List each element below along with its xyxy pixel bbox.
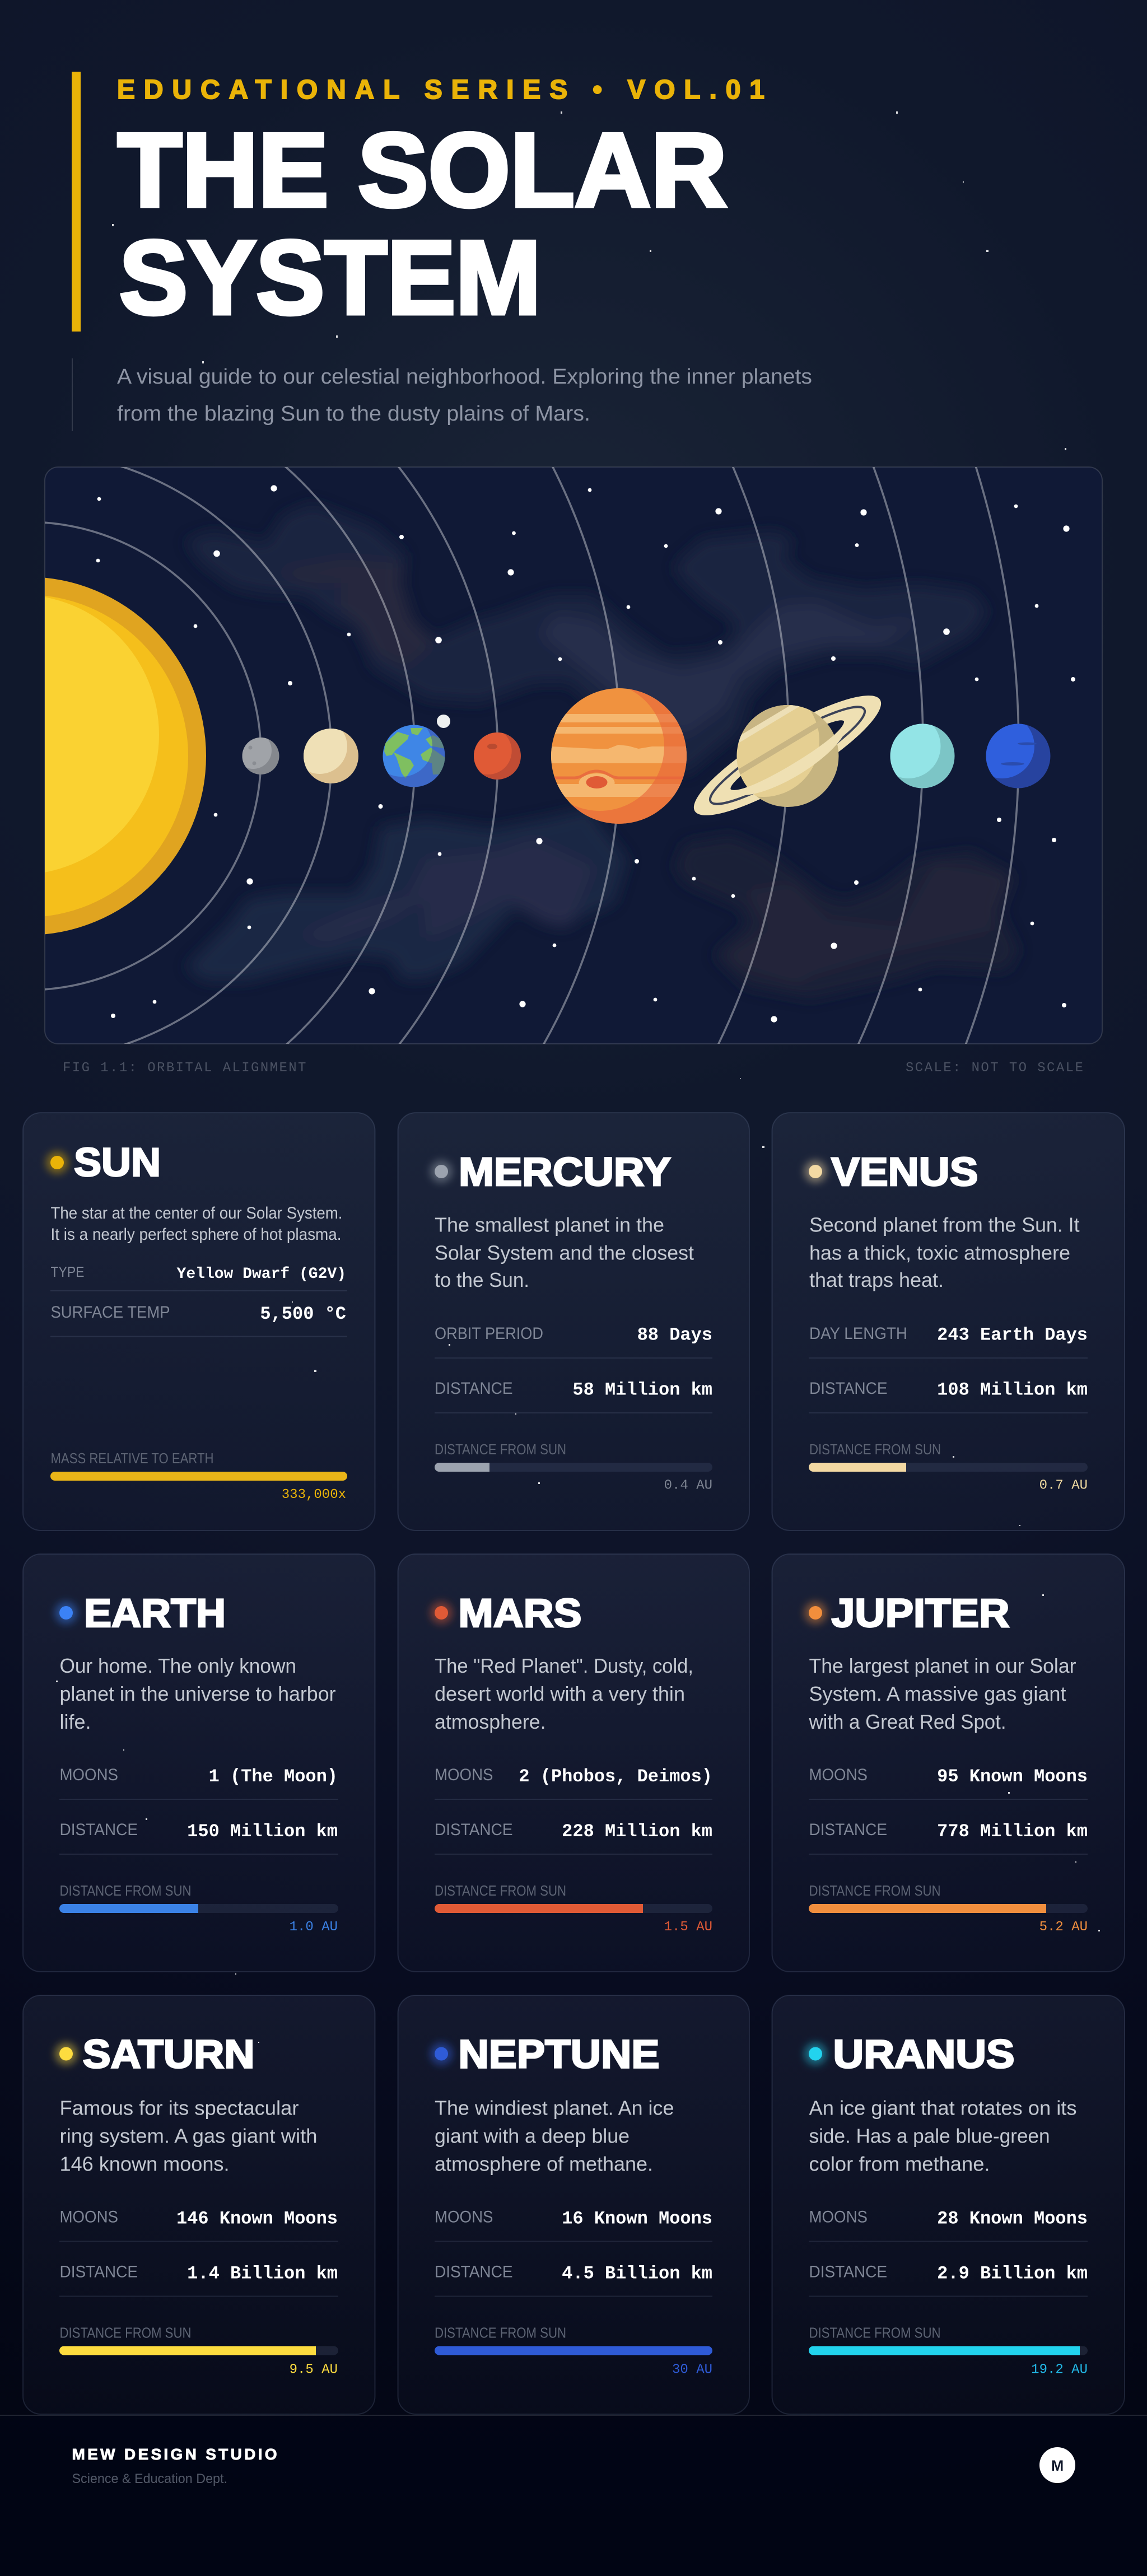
stat: type <box>50 1263 347 1291</box>
description: Solar System and the closest <box>435 1241 694 1264</box>
accent bar <box>72 72 81 332</box>
description <box>809 1213 1080 1291</box>
description: planet in the universe to harbor <box>59 1682 336 1705</box>
stat: moons: MOONS <box>59 2208 118 2227</box>
planet: mars <box>474 732 521 780</box>
heading: SATURN <box>83 2033 255 2076</box>
bar: distance from sun: DISTANCE FROM SUN <box>59 2324 192 2341</box>
stat: distance: 150 Million km <box>187 1821 338 1842</box>
subtitle: A visual guide to our celestial neighborhood. Exploring the inner planets <box>117 365 812 389</box>
stat: distance <box>435 2262 712 2297</box>
heading: JUPITER <box>831 1592 1009 1636</box>
description <box>435 2097 674 2175</box>
planet: saturn with rings <box>682 671 893 833</box>
description: atmosphere. <box>435 1710 545 1733</box>
stat: moons <box>435 2208 712 2242</box>
stat: moons <box>59 1766 338 1800</box>
subtitle: from the blazing Sun to the dusty plains of Mars. <box>117 402 590 426</box>
stat: moons: 1 (The Moon) <box>209 1766 338 1787</box>
heading: NEPTUNE <box>458 2033 660 2076</box>
subtitle rule <box>72 358 73 431</box>
bar: distance from sun: 0.7 AU <box>1039 1478 1088 1493</box>
description: has a thick, toxic atmosphere <box>809 1241 1070 1264</box>
title: THE SOLAR <box>118 111 727 228</box>
bar: distance from sun <box>435 1882 712 1935</box>
description: desert world with a very thin <box>435 1682 685 1705</box>
dot <box>430 2043 453 2065</box>
stat: distance: DISTANCE <box>435 2262 513 2281</box>
logo badge <box>1039 2447 1075 2483</box>
bar: distance from sun: DISTANCE FROM SUN <box>59 1882 192 1899</box>
heading: EARTH <box>84 1592 226 1636</box>
card: mars <box>398 1554 749 1972</box>
stat: moons: MOONS <box>435 1766 493 1784</box>
description <box>435 1213 694 1291</box>
logo badge: M <box>1051 2457 1064 2474</box>
bar: mass <box>50 1450 347 1502</box>
description: The "Red Planet". Dusty, cold, <box>435 1654 693 1677</box>
description: that traps heat. <box>809 1268 944 1291</box>
stat: distance <box>435 1379 712 1413</box>
stat: moons <box>435 1766 712 1800</box>
header <box>72 72 812 431</box>
planet: uranus <box>876 714 954 788</box>
bar: distance from sun: DISTANCE FROM SUN <box>435 2324 566 2341</box>
description <box>809 2097 1076 2175</box>
stat: distance: DISTANCE <box>809 2262 887 2281</box>
planet: venus <box>304 729 358 783</box>
stat: distance <box>809 2262 1088 2297</box>
bar: distance from sun: 0.4 AU <box>664 1478 712 1493</box>
panel: solar system illustration <box>44 466 1103 1044</box>
stat: distance: 228 Million km <box>562 1821 712 1842</box>
description: giant with a deep blue <box>435 2125 630 2147</box>
department: Science & Education Dept. <box>72 2471 227 2486</box>
stat: moons: MOONS <box>435 2208 493 2227</box>
description: System. A massive gas giant <box>809 1682 1066 1705</box>
description: with a Great Red Spot. <box>809 1710 1006 1733</box>
description: 146 known moons. <box>59 2153 230 2175</box>
card: venus <box>772 1113 1125 1530</box>
stat: type: Yellow Dwarf (G2V) <box>177 1266 346 1283</box>
description: life. <box>59 1710 91 1733</box>
stat: type: TYPE <box>50 1263 84 1280</box>
moon <box>437 715 450 728</box>
description: ring system. A gas giant with <box>59 2125 317 2147</box>
stat: distance: 2.9 Billion km <box>937 2264 1088 2284</box>
sun <box>45 578 206 934</box>
bar: distance from sun <box>809 2324 1088 2378</box>
bar: distance from sun: DISTANCE FROM SUN <box>435 1441 566 1458</box>
card: mercury <box>398 1113 749 1530</box>
stat: moons: 28 Known Moons <box>937 2209 1088 2229</box>
stat: moons: MOONS <box>809 2208 868 2227</box>
stat: distance: DISTANCE <box>59 2262 138 2281</box>
stat: surface temp: 5,500 °C <box>260 1304 346 1324</box>
planet: jupiter <box>535 682 689 826</box>
footer <box>0 2415 1147 2576</box>
stat: moons <box>809 2208 1088 2242</box>
description <box>59 1654 336 1733</box>
description: atmosphere of methane. <box>435 2153 653 2175</box>
title <box>118 111 727 336</box>
stat: distance <box>59 2262 338 2297</box>
heading: URANUS <box>833 2033 1015 2076</box>
orbit paths <box>45 467 1019 1044</box>
dot <box>804 1602 827 1624</box>
heading: MARS <box>458 1592 581 1636</box>
planet: mercury <box>242 738 279 774</box>
stat: day length: 243 Earth Days <box>937 1325 1088 1345</box>
description: The windiest planet. An ice <box>435 2097 674 2119</box>
card: earth <box>23 1554 375 1972</box>
nebula clouds <box>185 503 1019 999</box>
heading: SUN <box>74 1141 161 1185</box>
card: saturn <box>23 1995 375 2414</box>
stat: orbit period: ORBIT PERIOD <box>435 1324 543 1343</box>
stat: distance: 778 Million km <box>937 1821 1088 1842</box>
stat: distance: DISTANCE <box>435 1821 513 1839</box>
bar: distance from sun: DISTANCE FROM SUN <box>809 1882 941 1899</box>
bar: distance from sun: 1.0 AU <box>290 1920 338 1935</box>
dot <box>804 2043 827 2065</box>
description <box>50 1204 343 1244</box>
stat: distance <box>59 1821 338 1855</box>
stat: distance <box>809 1379 1088 1413</box>
card: neptune <box>398 1995 749 2414</box>
stat: day length: DAY LENGTH <box>809 1324 907 1343</box>
stat: distance: 108 Million km <box>937 1380 1088 1400</box>
stat: moons: 2 (Phobos, Deimos) <box>519 1766 712 1787</box>
dot <box>55 1602 77 1624</box>
stat: distance: DISTANCE <box>435 1379 513 1398</box>
description <box>59 2097 317 2175</box>
stat: surface temp <box>50 1303 347 1337</box>
description <box>435 1654 693 1733</box>
description: Second planet from the Sun. It <box>809 1213 1080 1236</box>
bar: distance from sun: 19.2 AU <box>1031 2362 1088 2378</box>
stat: moons <box>809 1766 1088 1800</box>
description: Famous for its spectacular <box>59 2097 299 2119</box>
bar: distance from sun: DISTANCE FROM SUN <box>809 1441 941 1458</box>
description <box>809 1654 1076 1733</box>
description: The smallest planet in the <box>435 1213 664 1236</box>
description: The largest planet in our Solar <box>809 1654 1076 1677</box>
bar: distance from sun: 5.2 AU <box>1039 1920 1088 1935</box>
stat: moons: 95 Known Moons <box>937 1766 1088 1787</box>
stat: moons: 146 Known Moons <box>176 2209 338 2229</box>
description: The star at the center of our Solar System. <box>50 1204 343 1222</box>
heading: VENUS <box>831 1150 978 1194</box>
bar: distance from sun <box>435 1441 712 1493</box>
bar: distance from sun <box>809 1441 1088 1493</box>
bar: mass: MASS RELATIVE TO EARTH <box>50 1450 214 1467</box>
caption: scale note: SCALE: NOT TO SCALE <box>906 1061 1084 1076</box>
bar: mass: 333,000x <box>282 1487 346 1502</box>
stat: orbit period <box>435 1324 712 1359</box>
stat: distance <box>809 1821 1088 1855</box>
dot <box>430 1160 453 1183</box>
stat: surface temp: SURFACE TEMP <box>50 1303 170 1322</box>
stat: moons: MOONS <box>809 1766 868 1784</box>
bar: distance from sun: 9.5 AU <box>290 2362 338 2378</box>
dot <box>46 1151 68 1174</box>
panel background <box>45 467 1102 1044</box>
card: sun <box>23 1113 375 1530</box>
description: to the Sun. <box>435 1268 529 1291</box>
illustration contents <box>45 467 1075 1044</box>
eyebrow: EDUCATIONAL SERIES • VOL.01 <box>117 75 764 105</box>
description: An ice giant that rotates on its <box>809 2097 1076 2119</box>
stat: orbit period: 88 Days <box>637 1325 712 1345</box>
scattered background stars <box>56 111 1100 2043</box>
stat: moons <box>59 2208 338 2242</box>
card: uranus <box>772 1995 1125 2414</box>
bar: distance from sun <box>435 2324 712 2378</box>
stat: distance <box>435 1821 712 1855</box>
description: color from methane. <box>809 2153 990 2175</box>
planet: earth <box>383 725 445 787</box>
bar: distance from sun: DISTANCE FROM SUN <box>809 2324 941 2341</box>
card: jupiter <box>772 1554 1125 1972</box>
description: side. Has a pale blue-green <box>809 2125 1050 2147</box>
description: It is a nearly perfect sphere of hot plasma. <box>50 1225 342 1244</box>
stat: distance: 4.5 Billion km <box>562 2264 712 2284</box>
bar: distance from sun: 1.5 AU <box>664 1920 712 1935</box>
caption: figure label: FIG 1.1: ORBITAL ALIGNMENT <box>63 1061 307 1076</box>
bar: distance from sun <box>59 1882 338 1935</box>
dot <box>55 2043 77 2065</box>
stat: distance: DISTANCE <box>59 1821 138 1839</box>
panel border <box>45 467 1102 1044</box>
stat: moons: 16 Known Moons <box>562 2209 712 2229</box>
bar: distance from sun <box>809 1882 1088 1935</box>
stars <box>96 485 1075 1023</box>
dot <box>804 1160 827 1183</box>
heading: MERCURY <box>459 1150 671 1194</box>
bar: distance from sun: 30 AU <box>672 2362 712 2378</box>
stat: distance: 1.4 Billion km <box>187 2264 338 2284</box>
dot <box>430 1602 453 1624</box>
bar: distance from sun: DISTANCE FROM SUN <box>435 1882 566 1899</box>
title: SYSTEM <box>119 219 541 336</box>
stat: distance: DISTANCE <box>809 1821 887 1839</box>
stat: distance: 58 Million km <box>572 1380 712 1400</box>
studio name: MEW DESIGN STUDIO <box>72 2446 277 2463</box>
stat: distance: DISTANCE <box>809 1379 887 1398</box>
bar: distance from sun <box>59 2324 338 2378</box>
footer background <box>0 2415 1147 2576</box>
description: Our home. The only known <box>59 1654 296 1677</box>
planet: neptune <box>970 714 1051 788</box>
stat: day length <box>809 1324 1088 1359</box>
stat: moons: MOONS <box>59 1766 118 1784</box>
subtitle <box>117 365 812 426</box>
